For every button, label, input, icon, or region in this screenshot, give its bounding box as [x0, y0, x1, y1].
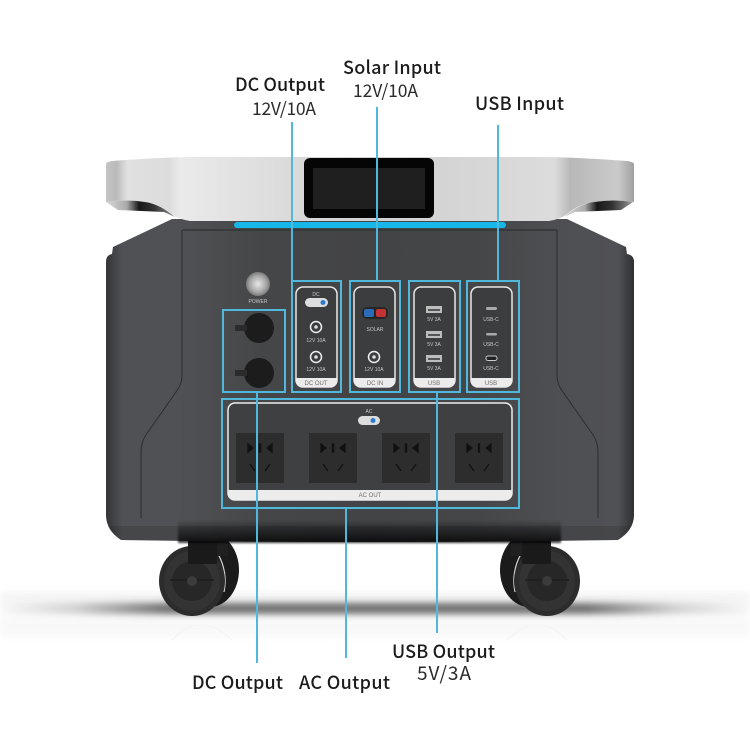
label: USB output: 5V/3A — [417, 659, 471, 686]
label: DC output top — [235, 71, 325, 121]
label: solar input: Solar Input — [343, 54, 441, 80]
panel: DC out — [296, 287, 337, 387]
label: solar input — [343, 54, 441, 103]
LED light bar — [234, 222, 506, 228]
label: DC output top: DC Output — [235, 71, 325, 97]
panel: AC out: AC — [366, 409, 373, 415]
panel: USB output — [414, 287, 455, 387]
panel: DC in — [354, 287, 395, 387]
panel: DC in: DC IN — [367, 381, 383, 387]
panel: DC in: 12V 10A — [364, 367, 384, 373]
label: AC output: AC Output — [299, 669, 390, 695]
panel: USB input: USB-C — [483, 342, 499, 348]
label: USB output — [392, 638, 495, 686]
panel: USB output: USB — [428, 381, 440, 387]
panel: DC out: 12V 10A — [306, 367, 326, 373]
panel: USB output: 5V 3A — [427, 366, 441, 372]
panel: USB input: USB-C — [483, 366, 499, 372]
floor shadow — [0, 592, 750, 637]
panel: DC out: DC OUT — [304, 381, 328, 387]
panel: USB input: USB-C — [483, 317, 499, 323]
panel: AC out: AC OUT — [359, 493, 382, 499]
panel: USB input: USB — [485, 381, 497, 387]
panel: DC in: SOLAR — [367, 327, 384, 333]
panel: USB output: 5V 3A — [427, 342, 441, 348]
label: DC output bottom: DC Output — [192, 669, 283, 695]
label: USB input: USB Input — [475, 90, 564, 116]
panel: USB input — [471, 287, 512, 387]
panel: DC out: DC — [312, 292, 320, 298]
left wheel — [159, 533, 239, 640]
panel: DC out: 12V 10A — [306, 338, 326, 344]
display screen — [304, 158, 434, 218]
top lid — [106, 157, 634, 221]
DC output sockets — [235, 313, 274, 388]
power button — [246, 272, 270, 305]
panel: USB output: 5V 3A — [427, 317, 441, 323]
label: solar input: 12V/10A — [353, 78, 418, 103]
highlight boxes and leader lines — [222, 107, 519, 663]
panel: AC out — [228, 403, 512, 500]
label: USB output: USB Output — [392, 638, 495, 664]
label: DC output top: 12V/10A — [252, 96, 316, 121]
right wheel — [500, 533, 580, 640]
unit body — [106, 219, 634, 543]
power button: POWER — [249, 299, 268, 305]
